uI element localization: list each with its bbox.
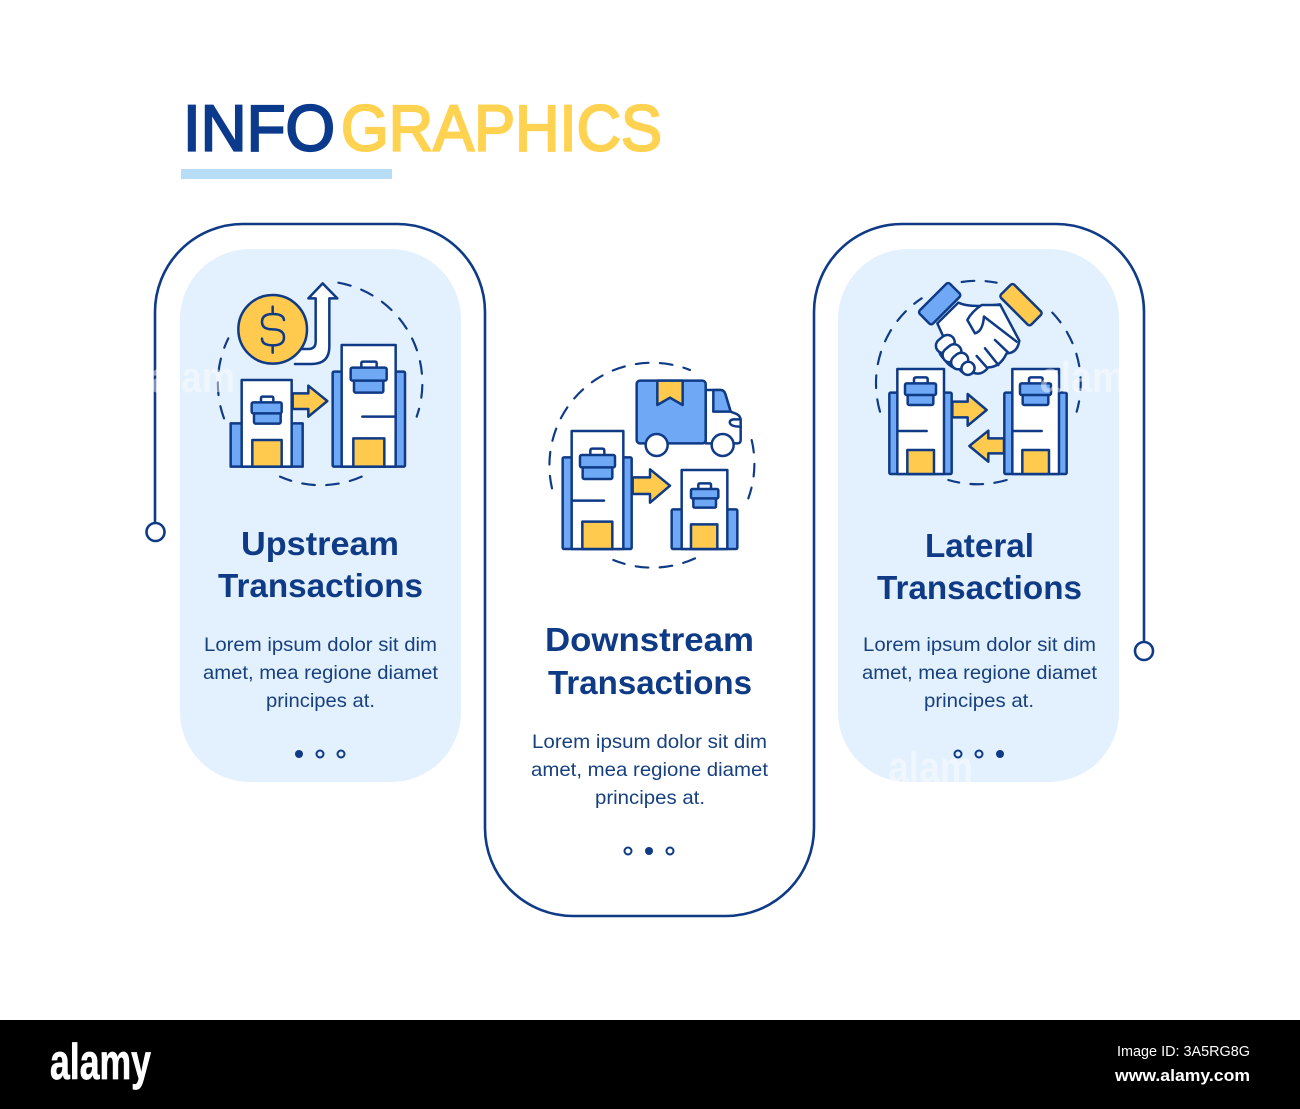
- connecting outline frame: [146, 224, 1153, 916]
- handshake: [918, 282, 1043, 377]
- icon: downstream transactions: [549, 363, 754, 568]
- faint stock-photo watermarks: alam: [888, 743, 973, 792]
- body text: upstream: Lorem ipsum dolor sit dim: [204, 634, 437, 656]
- heading: downstream: [545, 621, 754, 701]
- body text: upstream: principes at.: [266, 690, 375, 712]
- pagination dots: downstream: [624, 847, 674, 855]
- heading: lateral: Lateral: [925, 527, 1034, 564]
- arrow right: [952, 394, 987, 426]
- big building: [333, 345, 405, 467]
- watermark footer bar: [0, 1020, 1300, 1109]
- dashed ring: [218, 283, 422, 485]
- dashed ring: [549, 363, 754, 568]
- yellow arrow: [633, 469, 670, 503]
- up arrow: [295, 283, 337, 364]
- left building: [889, 369, 952, 474]
- heading: downstream: Transactions: [548, 664, 752, 701]
- heading: upstream: Upstream: [241, 525, 399, 562]
- title: INFO: [183, 92, 335, 164]
- panel: lateral background: [838, 249, 1119, 782]
- heading: downstream: Downstream: [545, 621, 754, 658]
- large building: [563, 431, 632, 549]
- image id: Image ID: 3A5RG8G: [1117, 1043, 1250, 1060]
- heading: lateral: [877, 527, 1082, 606]
- body text: lateral: [862, 634, 1098, 712]
- body text: upstream: amet, mea regione diamet: [203, 662, 439, 684]
- body text: lateral: Lorem ipsum dolor sit dim: [863, 634, 1096, 656]
- pagination dots: lateral: [954, 750, 1004, 758]
- dashed ring: [876, 281, 1081, 484]
- body text: lateral: amet, mea regione diamet: [862, 662, 1098, 684]
- title: GRAPHICS: [341, 92, 662, 164]
- faint stock-photo watermarks: [150, 353, 1125, 792]
- delivery truck: [637, 381, 741, 456]
- yellow arrow: [293, 386, 327, 417]
- heading: upstream: [218, 525, 423, 604]
- panel: upstream background: [180, 249, 461, 782]
- body text: lateral: principes at.: [924, 690, 1034, 712]
- dollar coin: [238, 295, 307, 364]
- icon: lateral transactions: [876, 281, 1081, 484]
- title underline: [181, 169, 392, 179]
- body text: downstream: principes at.: [595, 787, 705, 809]
- title: [183, 92, 662, 164]
- body text: downstream: [531, 731, 769, 809]
- right building: [1004, 369, 1067, 474]
- watermark logo: alamy: [50, 1034, 151, 1090]
- website: www.alamy.com: [1114, 1066, 1250, 1085]
- body text: downstream: Lorem ipsum dolor sit dim: [532, 731, 767, 753]
- arrow left: [969, 431, 1004, 462]
- faint stock-photo watermarks: alam: [1040, 353, 1125, 402]
- body text: downstream: amet, mea regione diamet: [531, 759, 769, 781]
- small building: [672, 470, 737, 549]
- icon: upstream transactions: [218, 283, 422, 485]
- pagination dots: upstream: [295, 750, 344, 758]
- heading: lateral: Transactions: [877, 569, 1082, 606]
- faint stock-photo watermarks: alam: [150, 353, 235, 402]
- small building: [231, 380, 303, 467]
- body text: upstream: [203, 634, 439, 712]
- heading: upstream: Transactions: [218, 567, 423, 604]
